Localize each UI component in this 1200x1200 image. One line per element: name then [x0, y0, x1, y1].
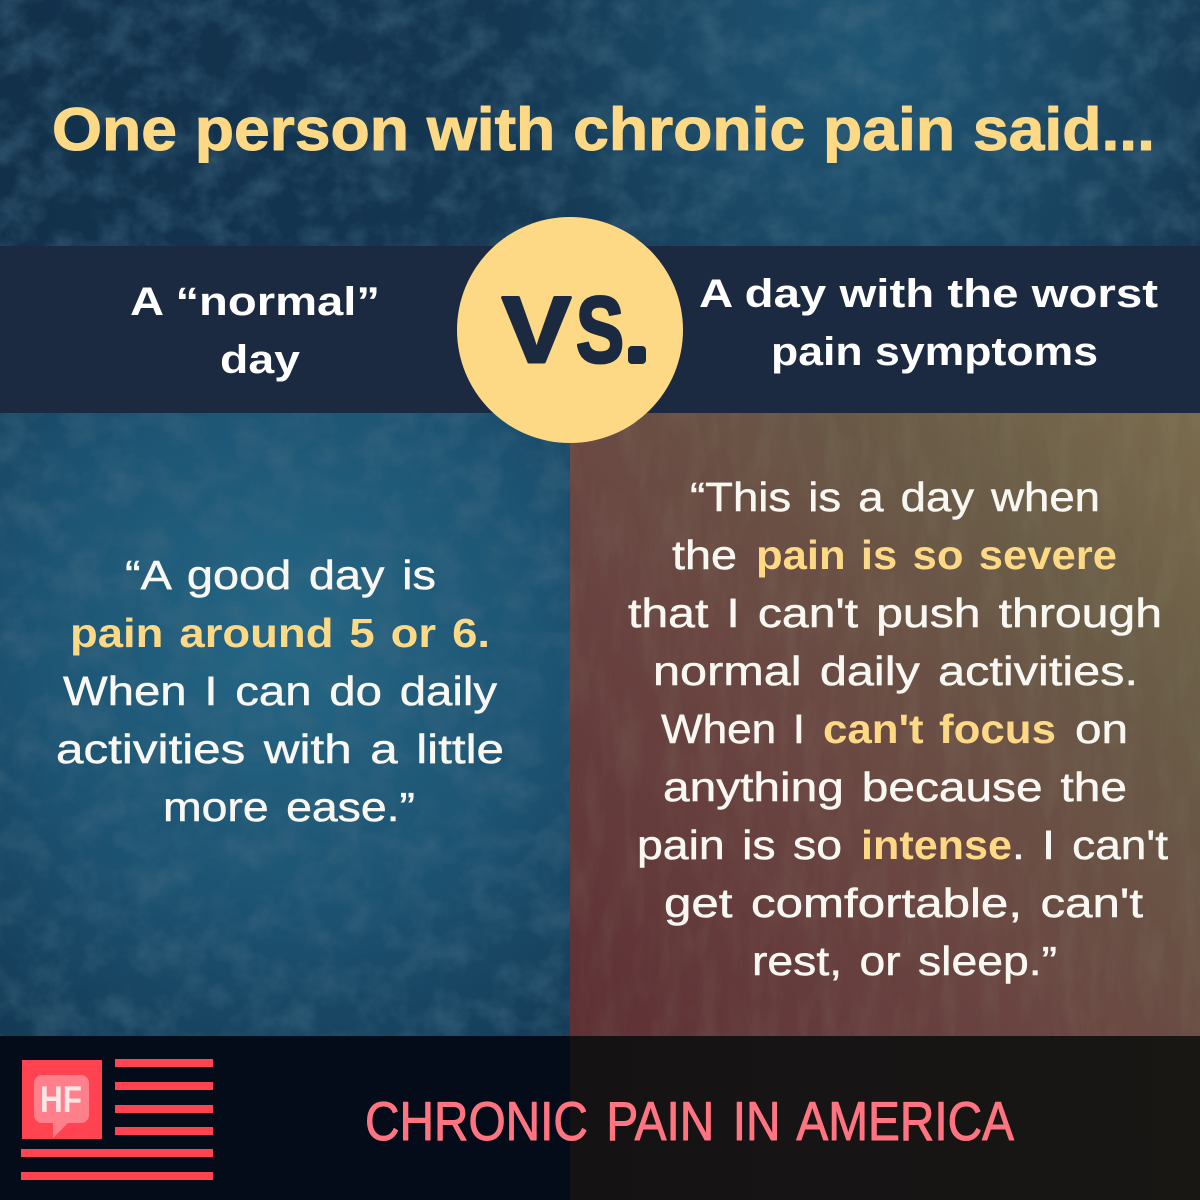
vs badge: S — [576, 277, 624, 382]
quote: normal day: “A good day is — [125, 552, 436, 598]
quote: worst day: on — [1075, 706, 1128, 752]
vs badge — [457, 217, 683, 443]
quote: worst day: normal daily activities. — [653, 648, 1138, 694]
heading: normal day — [130, 280, 380, 382]
quote: worst day: “This is a day when — [690, 474, 1100, 520]
quote: worst day: that I can't push through — [628, 590, 1162, 636]
quote: worst day: the — [672, 532, 737, 578]
quote: worst day: can't focus — [823, 706, 1056, 752]
icon: HF flag logo — [21, 1059, 213, 1180]
title: One person with chronic pain said... — [52, 96, 1155, 163]
quote: worst day: When I — [661, 706, 805, 752]
quote: worst day — [628, 474, 1169, 984]
quote: worst day: intense — [861, 822, 1012, 868]
heading: worst day: pain symptoms — [771, 330, 1098, 374]
icon: HF flag logo: HF — [40, 1079, 82, 1120]
quote: worst day: pain is so severe — [756, 532, 1117, 578]
quote: worst day: get comfortable, can't — [664, 880, 1144, 926]
footer bar — [0, 1036, 1200, 1200]
footer title: CHRONIC PAIN IN AMERICA — [365, 1090, 1014, 1152]
header band — [0, 246, 1200, 413]
panel: worst day background — [570, 413, 1200, 1037]
panel: normal day background — [0, 413, 570, 1037]
quote: normal day: more ease.” — [163, 784, 415, 830]
quote: normal day: When I can do daily — [63, 668, 498, 714]
vs badge: V — [502, 277, 571, 382]
quote: normal day: activities with a little — [56, 726, 504, 772]
heading: normal day: A “normal” — [130, 280, 380, 324]
heading: normal day: day — [220, 338, 301, 382]
quote: worst day: . I can't — [1012, 822, 1169, 868]
quote: normal day: pain around 5 or 6. — [70, 610, 490, 656]
quote: normal day — [56, 552, 504, 830]
quote: worst day: anything because the — [663, 764, 1127, 810]
heading: worst day — [699, 272, 1158, 374]
heading: worst day: A day with the worst — [699, 272, 1158, 316]
quote: worst day: rest, or sleep.” — [752, 938, 1057, 984]
quote: worst day: pain is so — [637, 822, 842, 868]
